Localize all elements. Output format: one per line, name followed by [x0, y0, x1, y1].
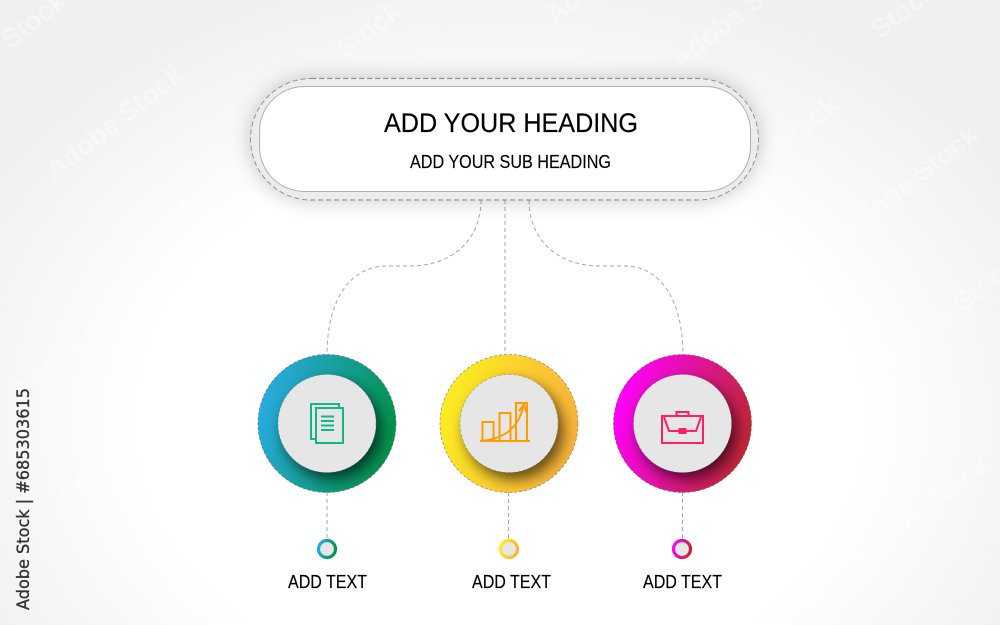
watermark pattern: Adobe Stock	[325, 289, 475, 415]
icon: briefcase	[662, 412, 703, 443]
watermark pattern: Adobe Stock	[545, 234, 695, 360]
connector lines	[327, 200, 683, 540]
watermark pattern: Adobe Stock	[695, 89, 845, 215]
stock credit: Adobe Stock | #685303615	[14, 388, 34, 610]
watermark pattern: Adobe Stock	[215, 229, 365, 355]
marker	[318, 540, 336, 558]
label: ADD TEXT	[472, 572, 551, 592]
watermark pattern: Adobe Stock	[515, 469, 665, 595]
watermark pattern: Adobe Stock	[170, 99, 320, 225]
item 3: marker and label	[643, 540, 722, 592]
watermark pattern: Adobe Stock	[380, 399, 530, 525]
watermark pattern: Adobe Stock	[40, 59, 190, 185]
watermark pattern: Adobe Stock	[175, 429, 325, 555]
title: ADD YOUR HEADING	[384, 108, 638, 138]
circle: growth chart	[440, 354, 578, 492]
marker	[674, 540, 690, 558]
marker	[500, 540, 518, 558]
panel outer dashed border	[250, 78, 758, 200]
circle: briefcase	[614, 354, 752, 492]
item 2: marker and label	[472, 540, 551, 592]
label: ADD TEXT	[643, 572, 722, 592]
item 1: marker and label	[288, 540, 367, 592]
watermark pattern: Adobe Stock	[845, 449, 995, 575]
icon: documents	[311, 404, 343, 443]
subtitle: ADD YOUR SUB HEADING	[410, 152, 611, 172]
watermark pattern: Adobe Stock	[5, 279, 155, 405]
icon: growth chart	[480, 403, 530, 441]
watermark pattern: Adobe Stock	[715, 409, 865, 535]
label: ADD TEXT	[288, 572, 367, 592]
circle: documents	[258, 354, 396, 492]
watermark pattern: Adobe Stock	[835, 119, 985, 245]
watermark pattern: Adobe Stock	[50, 389, 200, 515]
panel inner white pill	[260, 86, 750, 192]
heading panel	[250, 78, 758, 200]
